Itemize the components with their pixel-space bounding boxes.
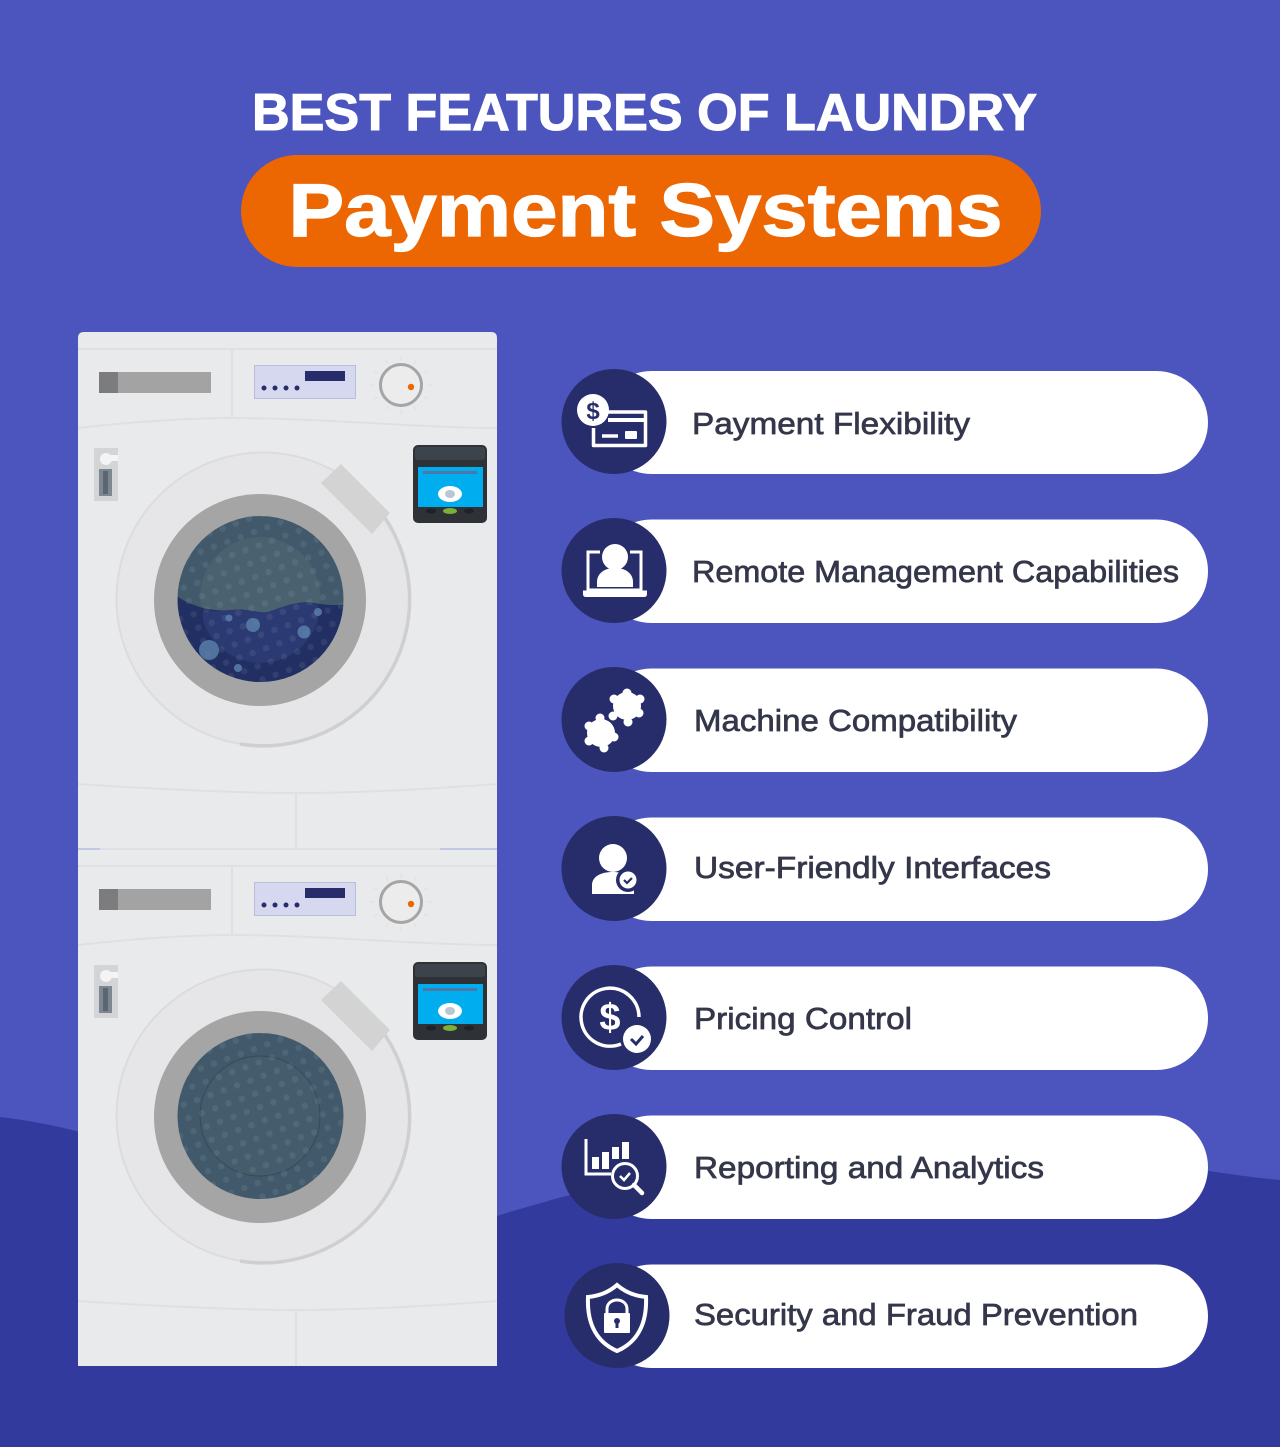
icon: dollar with check: $ [599,997,621,1039]
feature: User-Friendly Interfaces [562,816,1208,921]
door handle [321,464,390,534]
icon: payment card and coin [577,394,646,446]
door handle [321,981,390,1051]
icon: puzzle pieces [584,688,644,752]
illustration: stacked washing machines [78,332,497,1366]
background wave [0,1117,1280,1447]
label: Security and Fraud Prevention [694,1297,1138,1332]
title badge: Payment Systems [288,168,1002,252]
door glass with water [178,516,344,682]
feature: Pricing Control [562,965,1208,1070]
icon: verified user [592,844,640,894]
door glass [178,1033,344,1199]
icon: shield with lock [588,1285,646,1351]
door rim [154,494,366,706]
label: Payment Flexibility [692,406,971,441]
dial [379,880,423,924]
title badge [241,155,1041,267]
label: Machine Compatibility [694,703,1018,738]
icon: person on laptop [583,544,647,597]
icon: payment card and coin: $ [586,398,600,425]
label: User-Friendly Interfaces [694,850,1051,885]
door ring [116,452,334,744]
feature: Machine Compatibility [562,667,1208,772]
title: BEST FEATURES OF LAUNDRY [252,84,1037,142]
feature: Remote Management Capabilities [562,518,1208,623]
drawer handle [99,889,211,910]
machine: bottom washer [78,866,497,1366]
door ring [116,968,334,1262]
door latch [94,965,118,1018]
control display [254,366,356,398]
door rim [154,1011,366,1223]
payment terminal [413,445,487,523]
label: Reporting and Analytics [694,1150,1044,1185]
feature: Payment Flexibility [562,369,1208,474]
machine: top washer [78,349,497,849]
dial [379,363,423,407]
drawer handle [99,372,211,393]
icon: dollar with check [581,988,651,1053]
feature: Security and Fraud Prevention [564,1263,1208,1368]
door latch [94,448,118,501]
label: Pricing Control [694,1001,912,1036]
feature: Reporting and Analytics [562,1114,1208,1219]
control display [254,882,356,916]
payment terminal [413,962,487,1040]
icon: chart with magnifier [586,1139,642,1193]
label: Remote Management Capabilities [692,554,1179,589]
